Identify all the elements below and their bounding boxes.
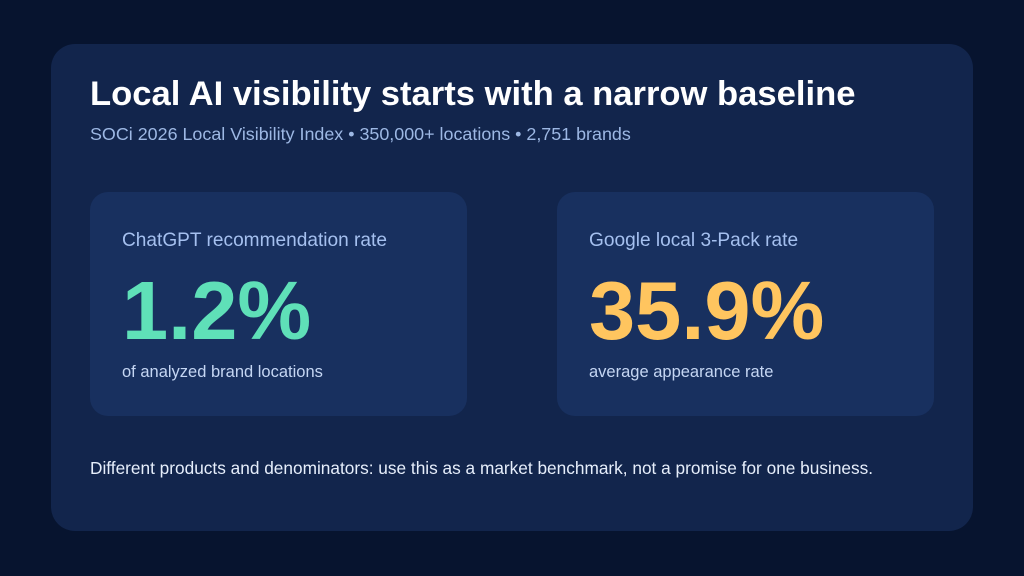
Google label: Google local 3-Pack rate — [589, 230, 798, 251]
ChatGPT label: ChatGPT recommendation rate — [122, 230, 387, 251]
subtitle: SOCi 2026 Local Visibility Index • 350,000+ locations • 2,751 brands — [90, 124, 631, 144]
panel: Google stat card — [557, 192, 934, 416]
panel: main background — [51, 44, 973, 531]
title: Local AI visibility starts with a narrow baseline — [90, 75, 855, 113]
panel: ChatGPT stat card — [90, 192, 467, 416]
footnote: Different products and denominators: use this as a market benchmark, not a promise for one business. — [90, 458, 873, 478]
Google caption: average appearance rate — [589, 363, 773, 381]
ChatGPT value: 1.2% — [122, 264, 311, 357]
ChatGPT caption: of analyzed brand locations — [122, 363, 323, 381]
Google value: 35.9% — [589, 264, 824, 357]
